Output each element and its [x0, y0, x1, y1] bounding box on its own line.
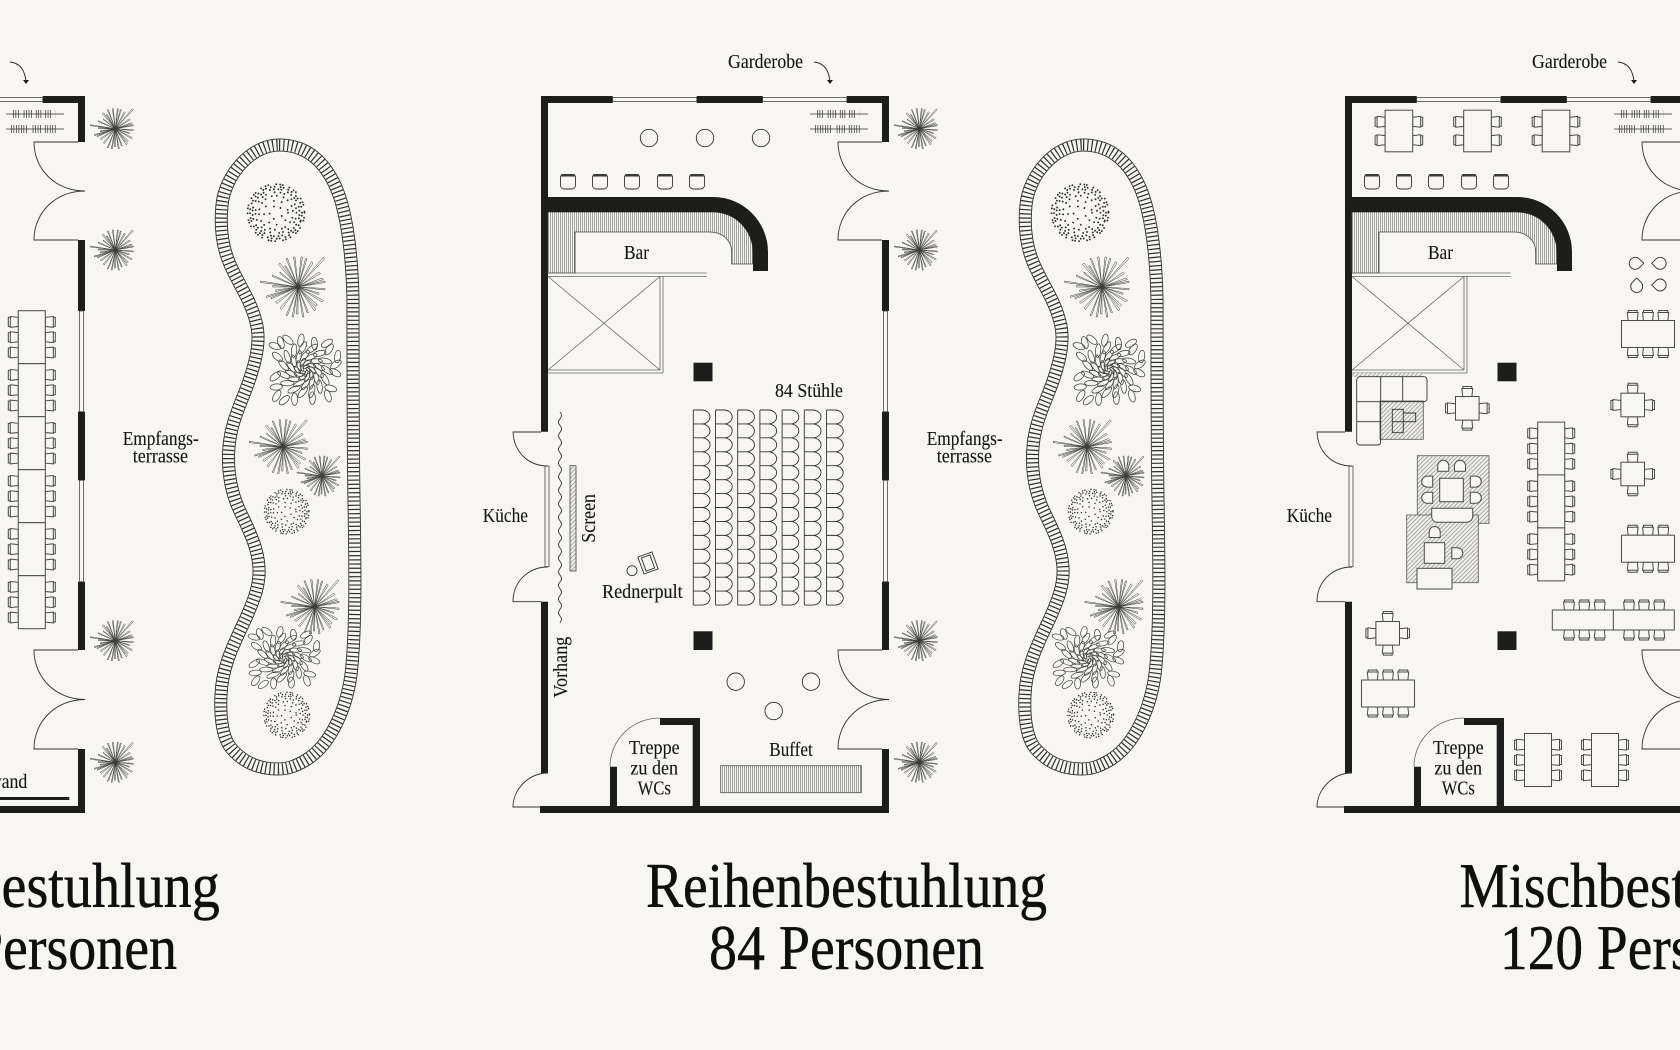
columns	[1498, 363, 1516, 650]
long table with chairs	[8, 311, 55, 629]
walls	[1344, 96, 1680, 813]
lower left tables	[1362, 612, 1414, 717]
round standing tables bottom	[727, 673, 820, 720]
windows and doors	[0, 98, 85, 807]
label: Bar: Bar	[624, 242, 649, 264]
label: Buffet: Buffet	[769, 739, 813, 761]
walls	[0, 96, 85, 813]
label: Treppe zu den WCs	[1433, 737, 1484, 800]
title: Reihenbestuhlung 84 Personen: 84 Personen	[709, 913, 984, 983]
label: Küche: Küche	[1287, 505, 1332, 527]
bar counter	[548, 197, 768, 273]
label: Screen: Screen	[578, 494, 600, 543]
label: Küche: Küche	[483, 505, 528, 527]
potted palms outside entrance	[894, 109, 937, 782]
potted palms outside entrance	[90, 109, 133, 782]
lounge: lower rug with table and chairs	[1407, 508, 1478, 589]
chair rows	[693, 410, 843, 605]
coat racks	[1614, 114, 1672, 129]
arrow: Garderobe	[814, 62, 833, 84]
table with four chairs	[1446, 386, 1489, 430]
floor plan: left layout, long banquet table	[0, 62, 355, 983]
floor plan: Reihenbestuhlung	[483, 51, 1159, 983]
lift shaft	[1352, 273, 1511, 373]
label: Empfangsterrasse	[927, 428, 1003, 468]
label: Vorhang: Vorhang	[550, 637, 572, 698]
coat racks	[6, 114, 64, 129]
label: Treppe zu den WCs: zu den	[1434, 758, 1482, 780]
walls	[540, 96, 889, 813]
coat racks	[810, 114, 868, 129]
right column tables	[1611, 310, 1674, 572]
title: left layout	[0, 851, 220, 983]
label: Empfangsterrasse: terrasse	[937, 446, 992, 468]
bottom tables	[1514, 734, 1628, 786]
arrow: Garderobe	[10, 62, 29, 84]
label: Garderobe: Garderobe	[728, 51, 803, 73]
windows and doors	[1317, 98, 1680, 807]
lounge sofa with rug	[1352, 373, 1427, 445]
windows and doors	[513, 98, 889, 807]
label: Treppe zu den WCs: WCs	[1442, 778, 1475, 800]
label: Treppe zu den WCs: zu den	[630, 758, 678, 780]
title: Reihenbestuhlung 84 Personen: Reihenbestuhlung	[646, 851, 1047, 921]
label: Treppe zu den WCs: WCs	[638, 778, 671, 800]
bar stools	[560, 174, 705, 189]
columns	[694, 363, 712, 650]
label: Treppe zu den WCs: Treppe	[629, 737, 680, 759]
top tables	[1375, 110, 1580, 152]
label: Empfangsterrasse: Empfangs-	[123, 428, 199, 450]
lift shaft	[548, 273, 707, 373]
long centre table	[1528, 422, 1575, 581]
label: Treppe zu den WCs	[629, 737, 680, 800]
label: Rednerpult: Rednerpult	[602, 581, 683, 603]
label: 84 Stühle: 84 Stühle	[775, 380, 843, 402]
label: Treppe zu den WCs: Treppe	[1433, 737, 1484, 759]
label: Empfangsterrasse: Empfangs-	[927, 428, 1003, 450]
round standing tables top	[640, 129, 770, 147]
terrace planter with plants	[1025, 145, 1159, 769]
arrow: Garderobe	[1618, 62, 1637, 84]
label: Empfangsterrasse: terrasse	[133, 446, 188, 468]
lounge: upper rug with table and chairs	[1417, 456, 1489, 523]
title: Mischbestuhlung 120 Personen	[1460, 851, 1680, 983]
screen line	[0, 797, 69, 800]
lectern	[627, 552, 658, 576]
terrace planter with plants	[221, 145, 355, 769]
label: Garderobe: Garderobe	[1532, 51, 1607, 73]
small chairs group	[1629, 257, 1666, 292]
curtain	[558, 412, 562, 623]
floor plan: Mischbestuhlung	[1287, 51, 1680, 983]
label: Bar: Bar	[1428, 242, 1453, 264]
screen	[570, 466, 576, 571]
label: Empfangsterrasse	[123, 428, 199, 468]
bar counter	[1352, 197, 1572, 273]
buffet table	[721, 766, 861, 793]
double horizontal table	[1552, 600, 1674, 640]
title: Reihenbestuhlung 84 Personen	[646, 851, 1047, 983]
bar stools	[1364, 174, 1509, 189]
